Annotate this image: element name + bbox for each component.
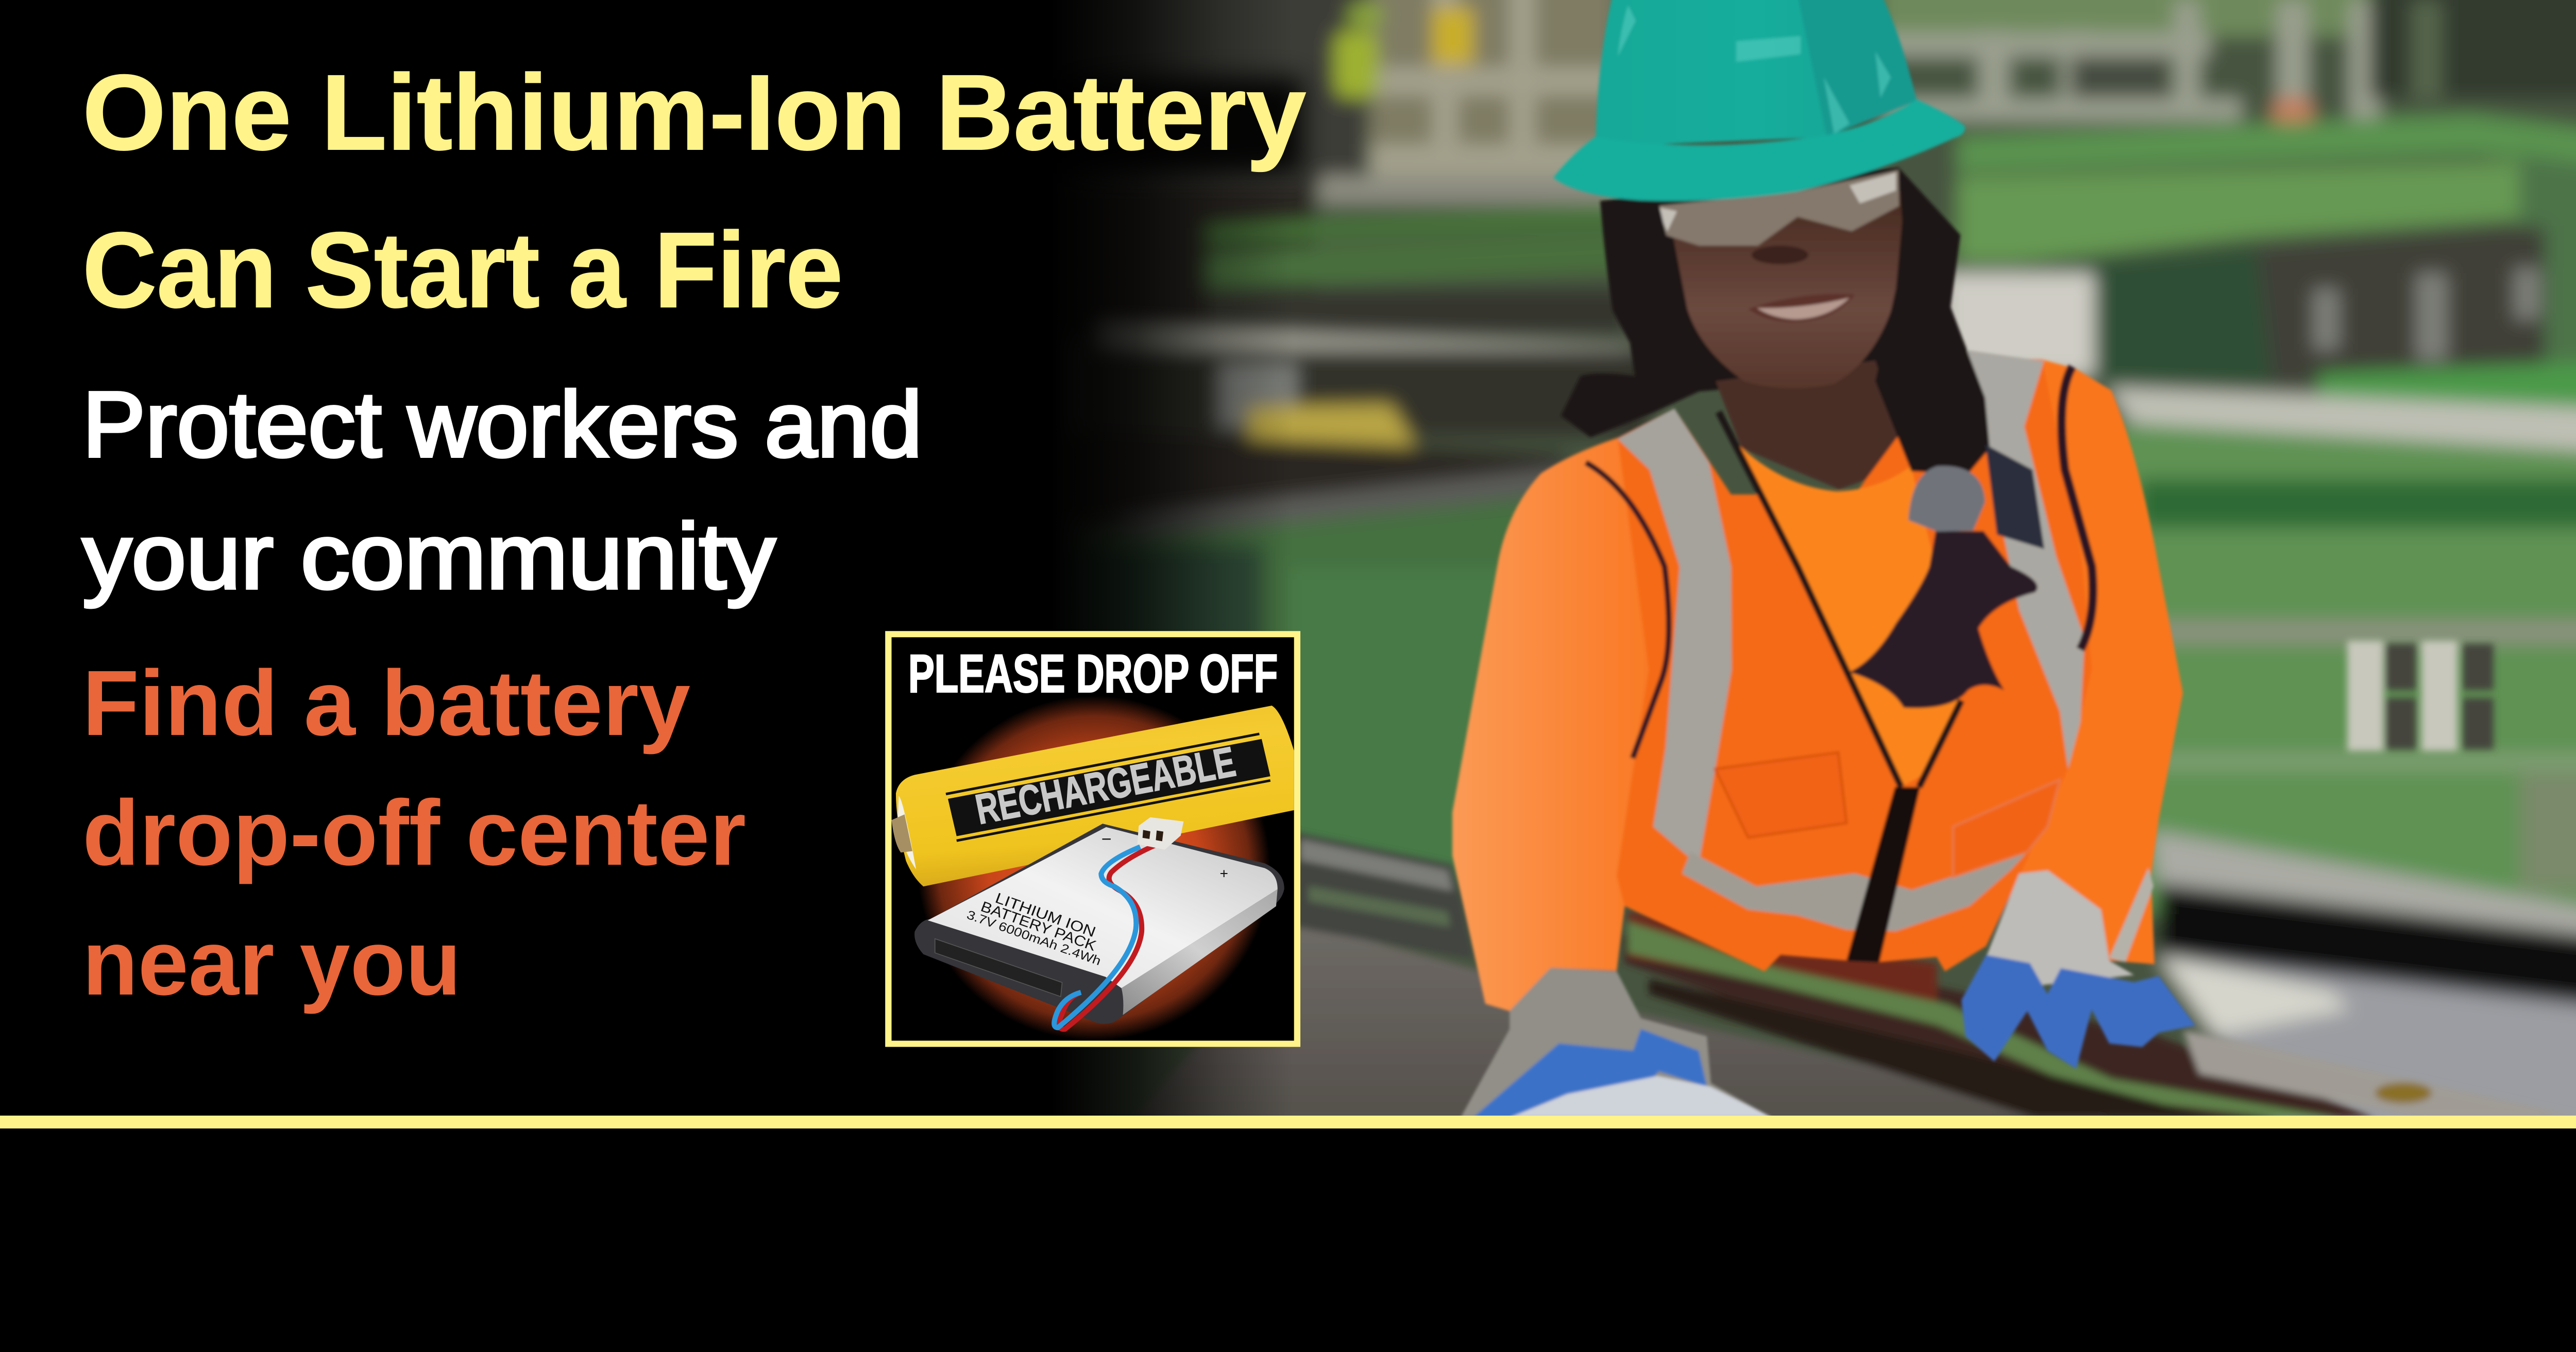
battery label text: RECHARGEABLE (972, 738, 1239, 833)
solid black left side (0, 0, 1052, 1118)
shirt collar and chest (1738, 444, 1973, 787)
mouth (1748, 294, 1855, 322)
call to action line 3: near you (82, 911, 461, 1015)
hair: front right (1875, 170, 1990, 474)
left reflective strap (1618, 408, 1732, 865)
black footer (0, 1116, 2576, 1352)
yellow divider line (0, 1116, 2576, 1128)
lower left wall (1056, 494, 1571, 906)
title line 2: Can Start a Fire (82, 211, 843, 330)
conveyor surface (1133, 922, 2112, 1120)
recyclables (2159, 955, 2576, 1185)
right reflective strap (1968, 350, 2084, 769)
call to action (82, 652, 746, 1015)
conveyor front rim (1623, 935, 2375, 1118)
green strip above rail (2318, 361, 2576, 412)
end slot (935, 939, 1062, 997)
lower right strap (2109, 868, 2154, 962)
text on wall: GARBAGE (1145, 539, 1431, 651)
wire: blue (1054, 847, 1140, 1028)
pack side (1122, 889, 1278, 1015)
call to action line 2: drop-off center (82, 781, 746, 885)
title (82, 53, 1306, 330)
title line 1: One Lithium-Ion Battery (82, 53, 1306, 173)
hard hat dome (1596, 0, 1917, 147)
lips (1757, 298, 1850, 319)
radio (1986, 444, 2044, 549)
bottom reflective stripe (1682, 852, 2027, 931)
title shadow over photo (1030, 77, 1303, 175)
call to action line 1: Find a battery (82, 652, 690, 755)
lower right rail (2150, 830, 2576, 943)
hair tail (1850, 531, 2038, 708)
plus mark: + (1219, 866, 1228, 882)
right glove (1970, 870, 2134, 993)
subtitle line 1: Protect workers and (82, 373, 922, 476)
right sleeve (2019, 360, 2183, 964)
icon: cylindrical rechargeable battery (892, 706, 1294, 886)
left rail (1097, 324, 1633, 373)
pack label line 2: BATTERY PACK (978, 898, 1098, 954)
connector pins (1143, 830, 1163, 841)
panel heading: PLEASE DROP OFF (908, 644, 1278, 704)
upper right green ledges (1958, 114, 2576, 173)
orange glow (918, 696, 1270, 1040)
wire: red (1059, 846, 1155, 1029)
pocket left (1715, 752, 1846, 837)
left glove (1461, 968, 1772, 1118)
battery terminal (898, 796, 916, 869)
pack body (914, 824, 1284, 1024)
upper left green ledges (1206, 203, 1623, 242)
grey box (1942, 273, 2094, 376)
black void (2159, 883, 2576, 1015)
label band (948, 739, 1270, 836)
pack label line 3: 3.7V 6000mAh 2.4Wh (965, 908, 1103, 968)
connector (1138, 817, 1183, 850)
hard hat side panel (1798, 0, 1917, 137)
inset panel: please drop off (888, 634, 1297, 1044)
hair tie (1908, 466, 1985, 532)
right vest piping (2062, 367, 2093, 649)
panel frame (888, 634, 1297, 1044)
conveyor (1133, 827, 2576, 1120)
icon: lithium ion battery pack (914, 817, 1284, 1029)
safety glasses (1657, 170, 1899, 246)
label lines (946, 734, 1270, 841)
glasses highlights (1657, 173, 1896, 232)
conveyor silver edge (2183, 1030, 2576, 1118)
vest body (1617, 355, 2092, 971)
dark opening (2017, 226, 2545, 384)
face (1669, 191, 1904, 388)
pack top (928, 827, 1278, 988)
hair: highlights (1618, 232, 1654, 330)
right rail (2108, 387, 2576, 453)
subtitle line 2: your community (82, 505, 775, 608)
pocket right (1953, 780, 2060, 877)
green paint strip (1628, 922, 2339, 1118)
wall labels (2347, 641, 2494, 751)
hair: front left wave (1561, 202, 1699, 437)
upper right railings (1880, 0, 2396, 36)
right glove blue (1961, 955, 2195, 1069)
subtitle (82, 373, 922, 608)
hard hat brim (1553, 99, 1965, 201)
hair: back (1561, 167, 1990, 466)
right wall (2112, 425, 2576, 914)
hard hat highlights (1618, 5, 1891, 134)
worker (1452, 0, 2195, 1118)
battery nub (892, 814, 912, 852)
left bin top (1061, 430, 1566, 525)
fade to black (1051, 0, 1293, 1128)
zipper (1846, 787, 1920, 962)
left glove blue (1473, 1029, 1707, 1118)
pack label (965, 890, 1103, 968)
neck (1716, 361, 1911, 489)
left sleeve (1452, 438, 1674, 1011)
photo background: blurred facility (979, 0, 2576, 1185)
upper left machinery (1056, 0, 1365, 191)
left vest piping (1586, 463, 1669, 758)
pack label line 1: LITHIUM ION (993, 890, 1098, 940)
cloth under left hand (1510, 1076, 1772, 1118)
conveyor left rim (1267, 827, 1473, 959)
lanyard (1719, 412, 1961, 787)
nose shadow (1752, 246, 1808, 264)
minus mark: − (1101, 830, 1112, 849)
